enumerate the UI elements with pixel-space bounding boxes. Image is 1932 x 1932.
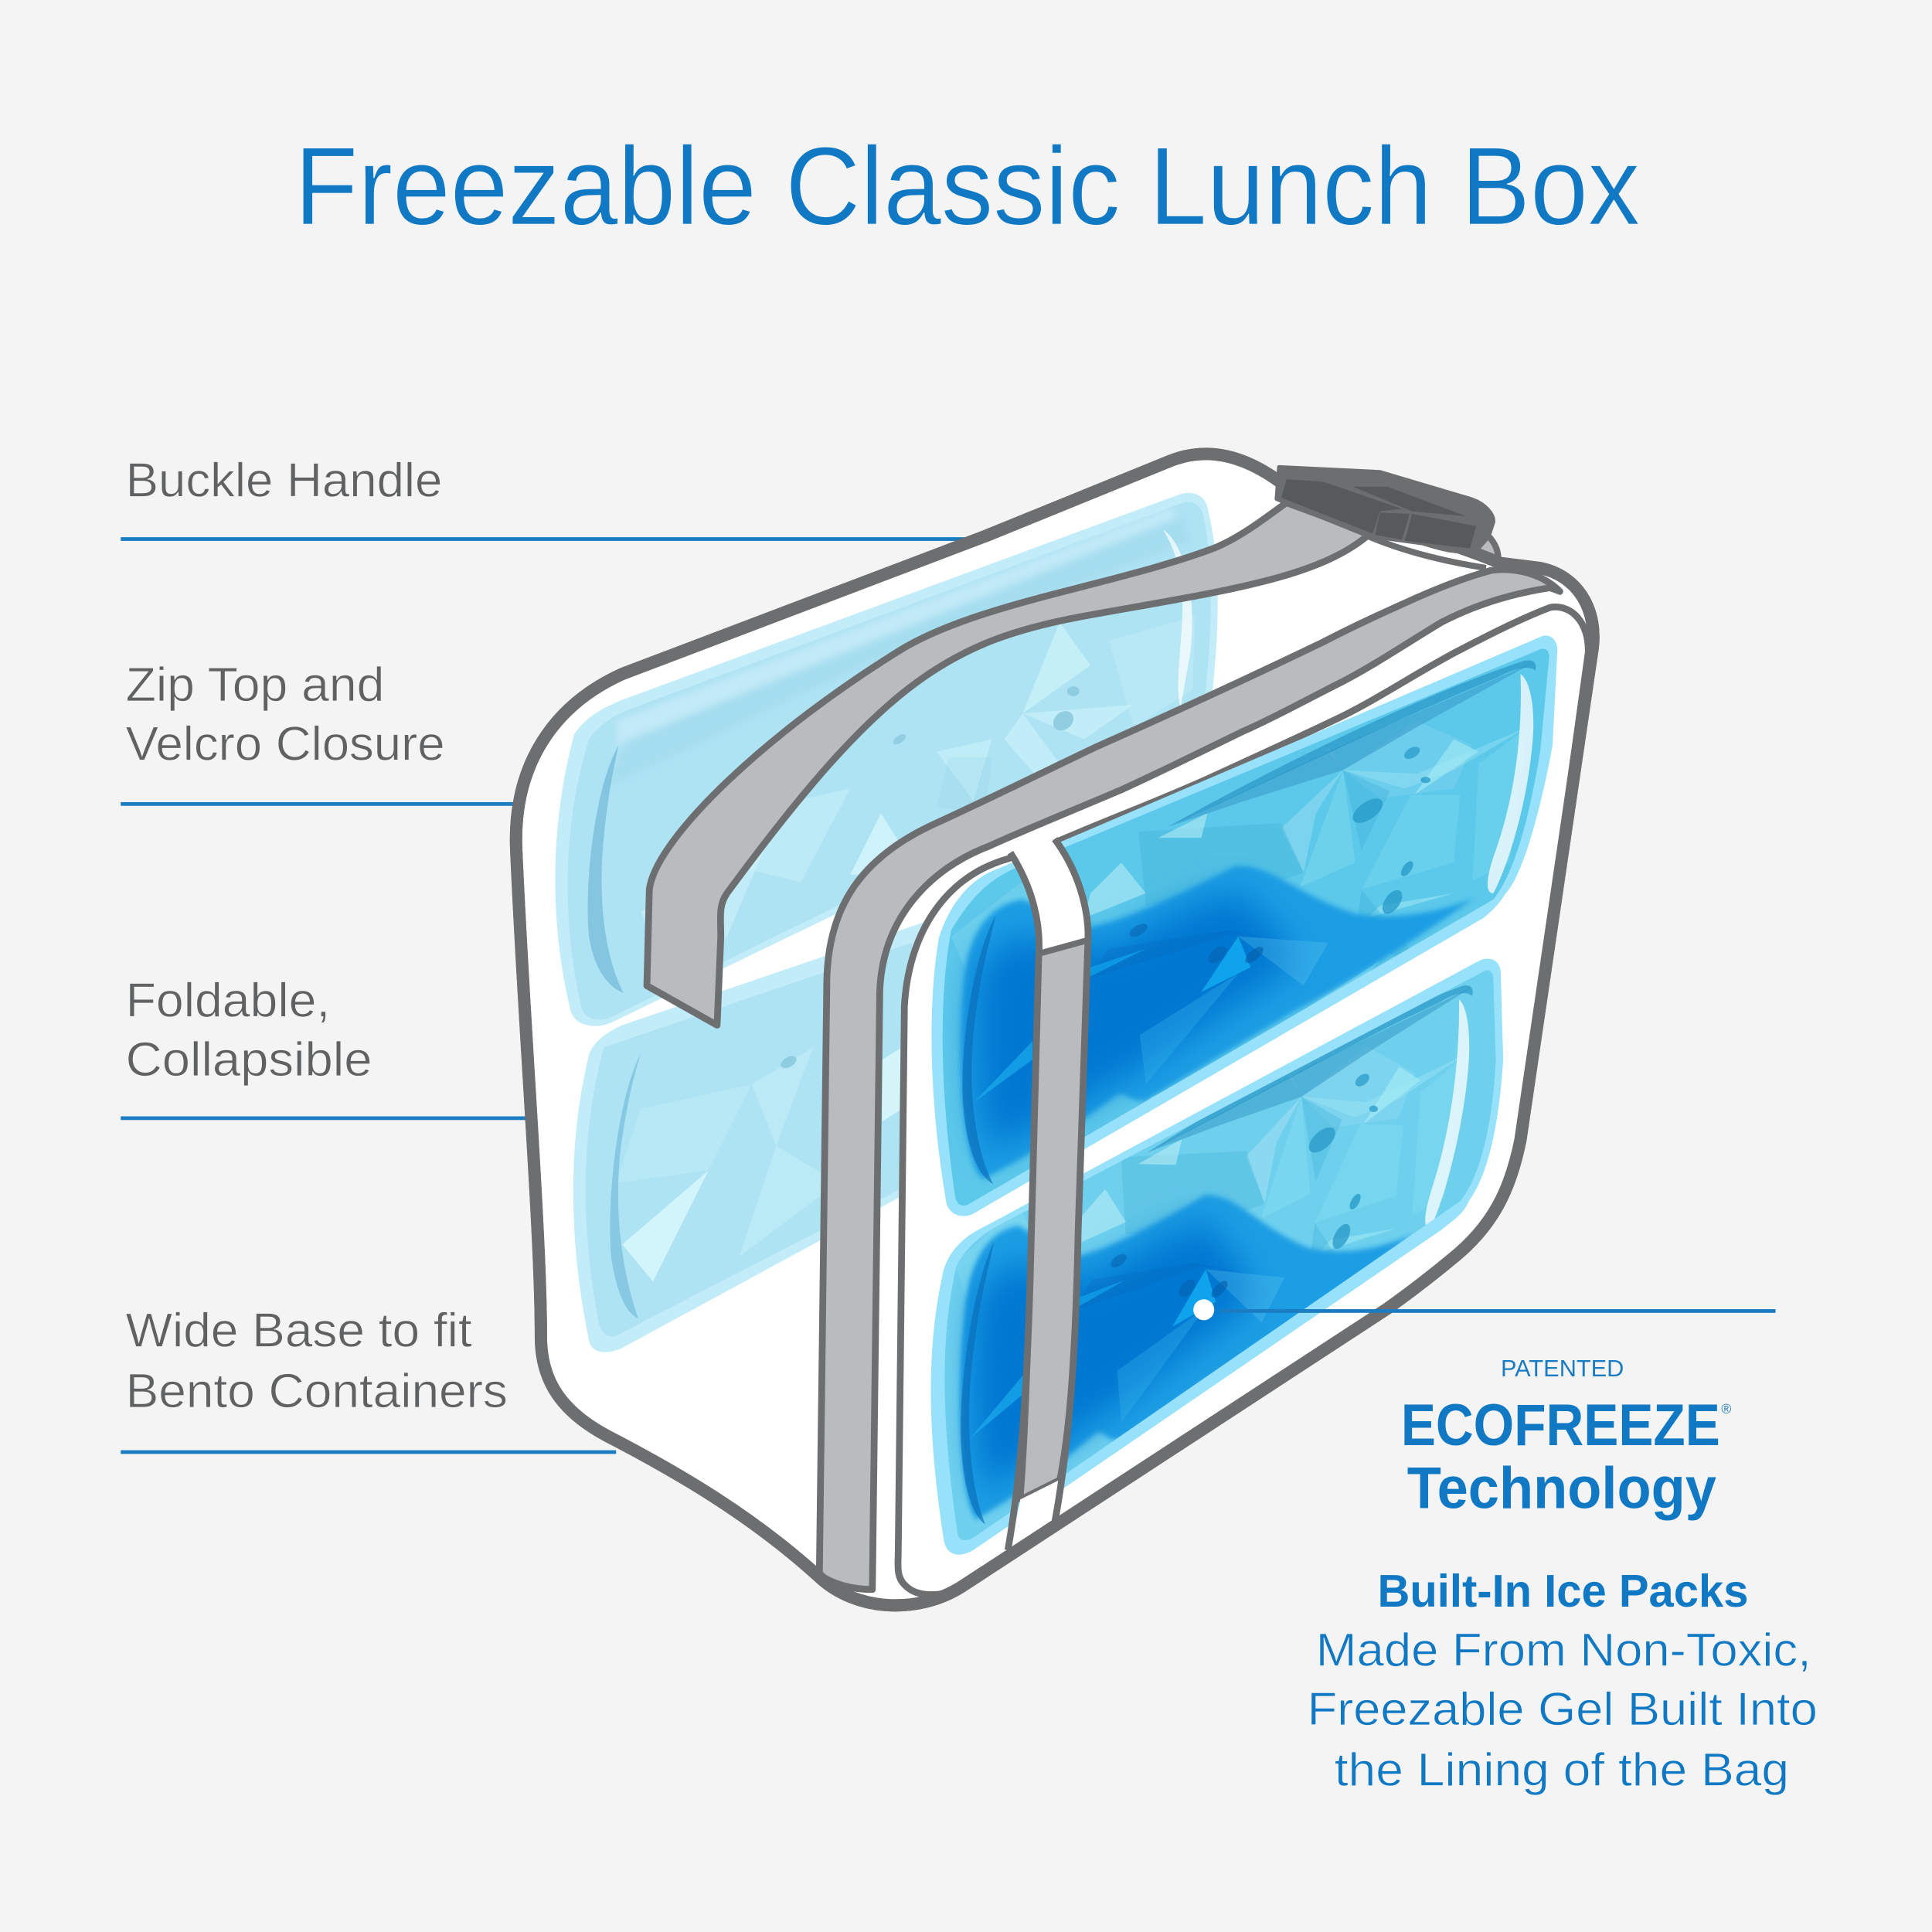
back ice pack upper [555, 493, 1218, 1026]
vertical strap: grey band [1020, 940, 1088, 1499]
text block: Ecofreeze technology: ECOFREEZE [1401, 1393, 1720, 1458]
label: Buckle Handle [121, 454, 989, 541]
label: Wide Base to fit Bento Containers [121, 1304, 616, 1454]
label: Foldable, Collapsible: Collapsible [126, 1033, 372, 1087]
bag body [516, 454, 1594, 1605]
text block: Ecofreeze technology [1401, 1356, 1731, 1522]
vertical strap: white bottom loop [1008, 1480, 1060, 1550]
text block: Ecofreeze technology: Technology [1407, 1456, 1716, 1522]
text block: built-in ice packs: Made From Non-Toxic, [1316, 1624, 1811, 1676]
callout: ice pack pointer [1193, 1299, 1776, 1320]
lunch box illustration [516, 454, 1594, 1605]
zipper band [819, 570, 1560, 1590]
strap below buckle [1368, 536, 1486, 568]
text block: built-in ice packs [1308, 1566, 1818, 1795]
handle loop behind buckle [1466, 532, 1498, 570]
text block: built-in ice packs: the Lining of the Bag [1335, 1743, 1789, 1795]
vertical strap: side edges [1008, 839, 1088, 1550]
bag body outline [516, 454, 1594, 1605]
text block: Ecofreeze technology: PATENTED [1501, 1356, 1624, 1382]
label: Foldable, Collapsible: Foldable, [126, 974, 330, 1027]
front ice pack lower [931, 958, 1503, 1555]
text block: built-in ice packs: Freezable Gel Built Into [1308, 1682, 1818, 1735]
label: Wide Base to fit Bento Containers: Bento Containers [126, 1365, 508, 1418]
text block: built-in ice packs: Built-In Ice Packs [1378, 1566, 1748, 1617]
label: Wide Base to fit Bento Containers: Wide Base to fit [126, 1304, 472, 1358]
label: Zip Top and Velcro Closure: Zip Top and [126, 658, 384, 712]
buckle [1277, 467, 1494, 552]
front ice pack upper [931, 635, 1557, 1216]
text block: Ecofreeze technology: ® [1721, 1401, 1731, 1417]
back ice pack lower [573, 918, 949, 1352]
vertical strap: white top loop [1010, 839, 1088, 956]
front panel [898, 607, 1588, 1595]
label: Foldable, Collapsible [121, 974, 532, 1120]
title: Freezable Classic Lunch Box [294, 124, 1640, 248]
carry handle strap [647, 503, 1370, 1026]
label: Zip Top and Velcro Closure [121, 658, 515, 806]
label: Buckle Handle: Buckle Handle [126, 454, 442, 508]
label: Zip Top and Velcro Closure: Velcro Closure [126, 718, 445, 771]
